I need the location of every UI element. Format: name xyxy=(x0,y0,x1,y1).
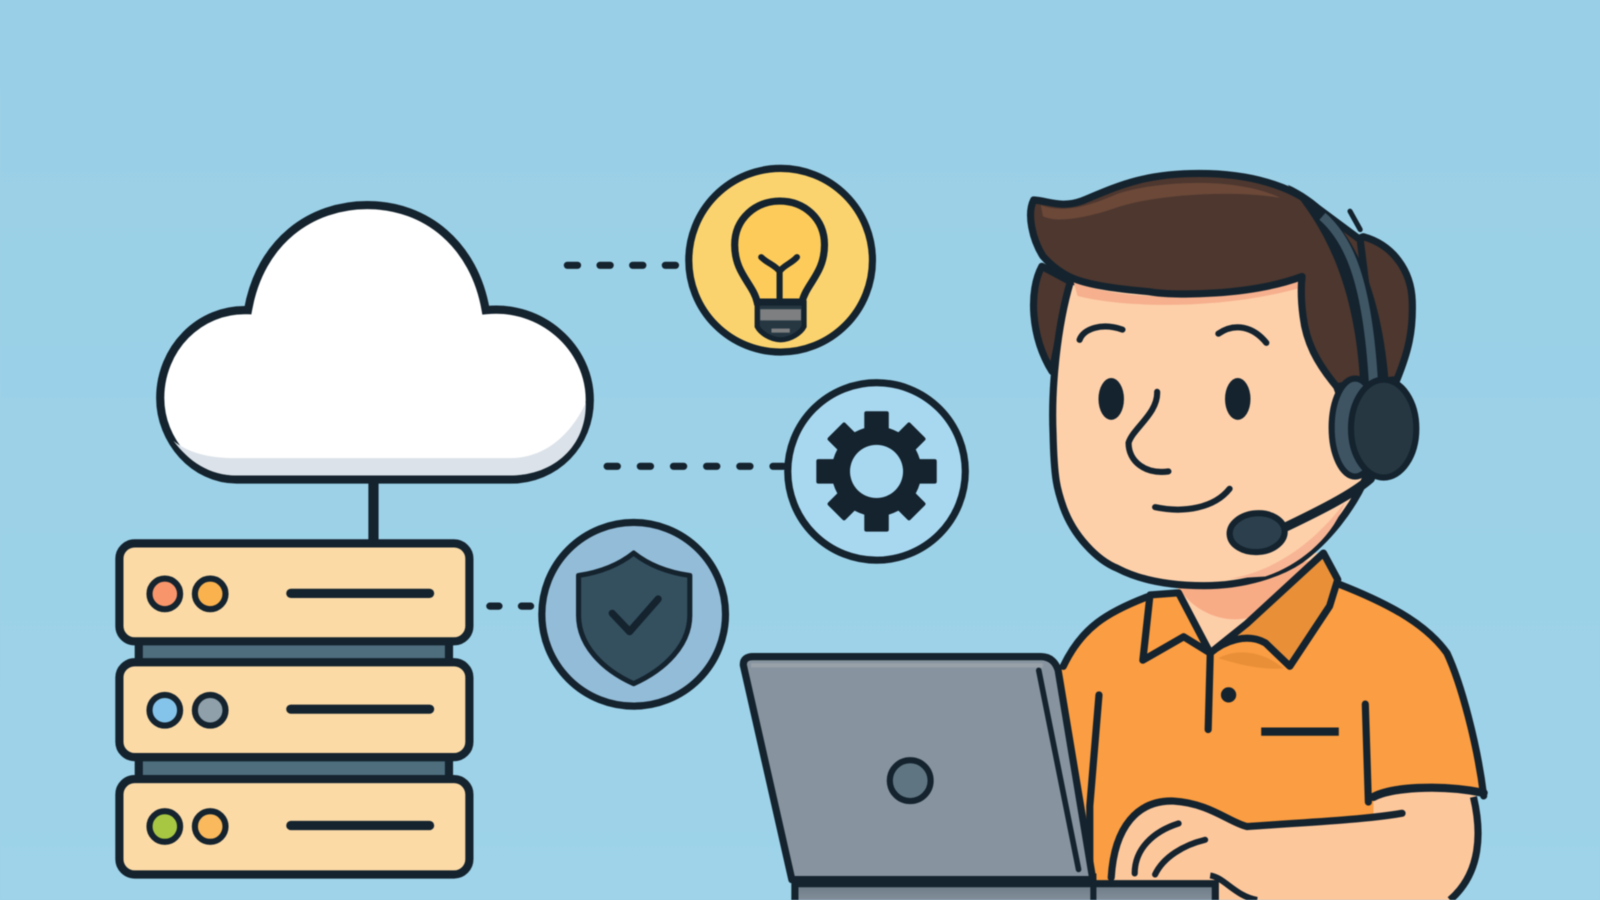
shirt details xyxy=(1090,655,1368,873)
smile xyxy=(1155,489,1230,510)
connector: cloud to server xyxy=(368,480,378,546)
server unit 1 xyxy=(119,543,469,641)
icon: shield xyxy=(542,522,726,706)
forehead shadow xyxy=(1073,279,1304,305)
dashed connector: lightbulb xyxy=(567,262,678,269)
neck shadow xyxy=(1179,559,1316,619)
face xyxy=(1053,277,1367,586)
icon: cloud xyxy=(160,205,590,480)
server unit 2 xyxy=(119,662,469,757)
person: support agent xyxy=(1031,173,1484,900)
arm and hand xyxy=(1111,788,1484,900)
shirt xyxy=(1061,553,1484,900)
dashed connector: shield xyxy=(490,603,531,610)
server unit 3 xyxy=(119,779,469,874)
hair back xyxy=(1034,237,1412,387)
nose xyxy=(1129,392,1168,472)
laptop xyxy=(743,657,1215,900)
neck xyxy=(1173,551,1327,653)
chin shadow xyxy=(1230,502,1345,579)
eyebrows xyxy=(1080,327,1266,343)
dashed connector: gear xyxy=(607,463,786,470)
server connectors xyxy=(139,641,449,780)
eyes xyxy=(1098,378,1251,420)
collar xyxy=(1143,553,1338,669)
icon: lightbulb xyxy=(689,168,872,352)
headset xyxy=(1228,185,1416,554)
icon: gear xyxy=(788,383,965,560)
icon: server rack xyxy=(119,543,469,874)
hair front xyxy=(1031,173,1378,387)
hair highlight xyxy=(1041,183,1281,219)
